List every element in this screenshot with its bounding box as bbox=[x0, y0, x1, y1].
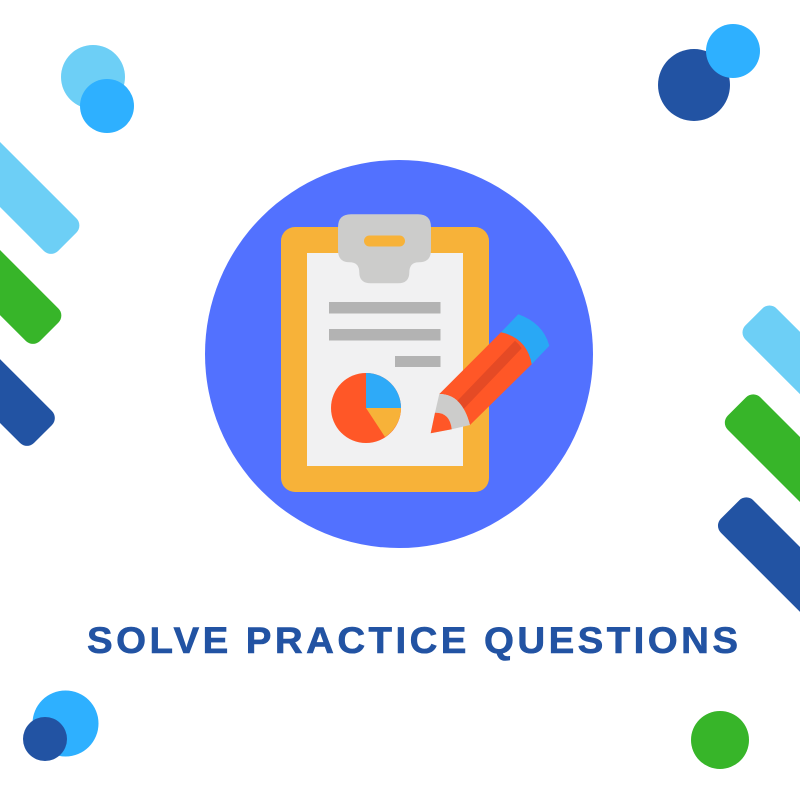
pencil body bbox=[439, 332, 532, 425]
pie chart bbox=[331, 373, 401, 443]
clip slot bbox=[364, 236, 405, 246]
clipboard board bbox=[281, 227, 489, 492]
central blue circle bbox=[205, 160, 593, 548]
icon: clipboard bbox=[281, 214, 489, 492]
top-left circles bbox=[61, 45, 134, 133]
pencil wood bbox=[431, 394, 470, 433]
paper sheet bbox=[307, 253, 463, 466]
title: SOLVE PRACTICE QUESTIONS bbox=[87, 620, 738, 661]
left diagonal bars bbox=[0, 128, 84, 450]
pencil tip bbox=[431, 413, 452, 433]
right diagonal bars bbox=[714, 301, 800, 639]
top-right circles bbox=[658, 24, 760, 121]
bottom-right circle bbox=[691, 711, 749, 769]
pencil stripe bbox=[455, 341, 522, 410]
clip bbox=[338, 214, 431, 283]
icon: pencil bbox=[431, 314, 549, 433]
pencil eraser bbox=[501, 314, 549, 364]
text lines bbox=[329, 302, 440, 367]
bottom-left circles bbox=[23, 690, 98, 761]
